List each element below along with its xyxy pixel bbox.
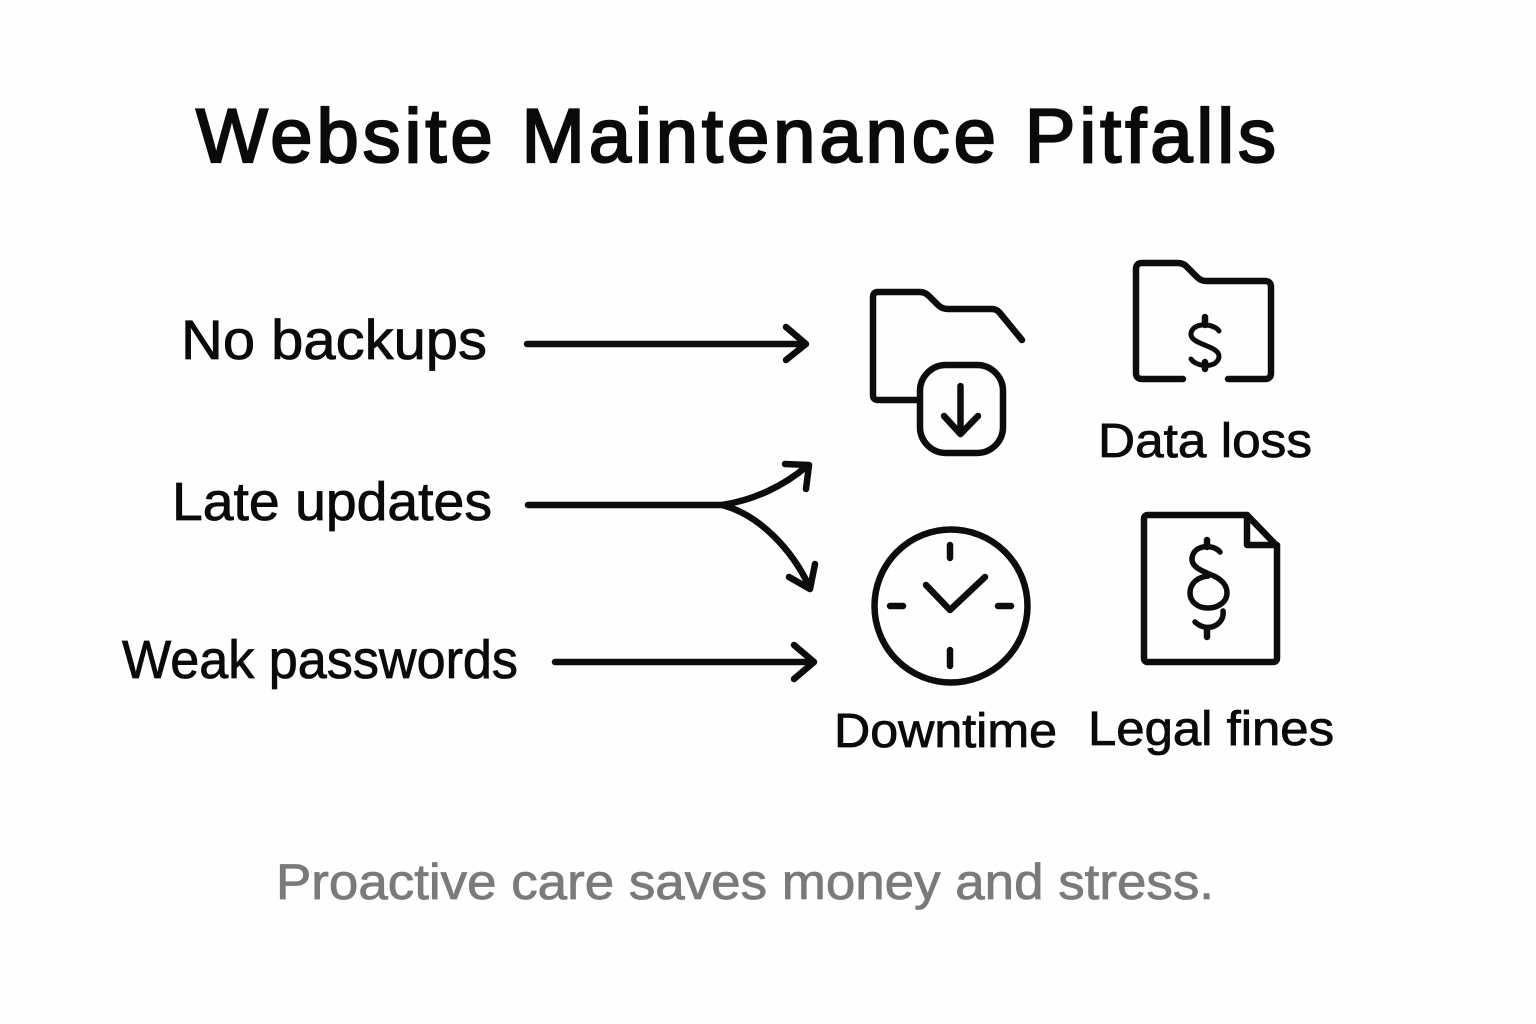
- label: Downtime: Downtime: [834, 705, 1057, 758]
- arrow: Weak passwords to downtime: [555, 645, 814, 679]
- cause label: No backups: No backups: [181, 308, 487, 371]
- cause label: Late updates: Late updates: [172, 472, 492, 532]
- icon: folder with download: [873, 292, 1022, 453]
- footer tagline: Proactive care saves money and stress.: [276, 854, 1214, 910]
- arrow: Late updates splitting to both outcomes: [528, 464, 815, 589]
- arrow: No backups to data loss: [527, 327, 806, 360]
- icon: clock: [874, 530, 1028, 682]
- label: Data loss: Data loss: [1098, 415, 1312, 468]
- cause label: Weak passwords: Weak passwords: [122, 630, 518, 690]
- label: Legal fines: Legal fines: [1088, 703, 1334, 756]
- title: Website Maintenance Pitfalls: [196, 94, 1276, 179]
- icon: legal document with dollar sign: [1144, 515, 1277, 662]
- icon: folder with dollar sign: [1136, 263, 1271, 379]
